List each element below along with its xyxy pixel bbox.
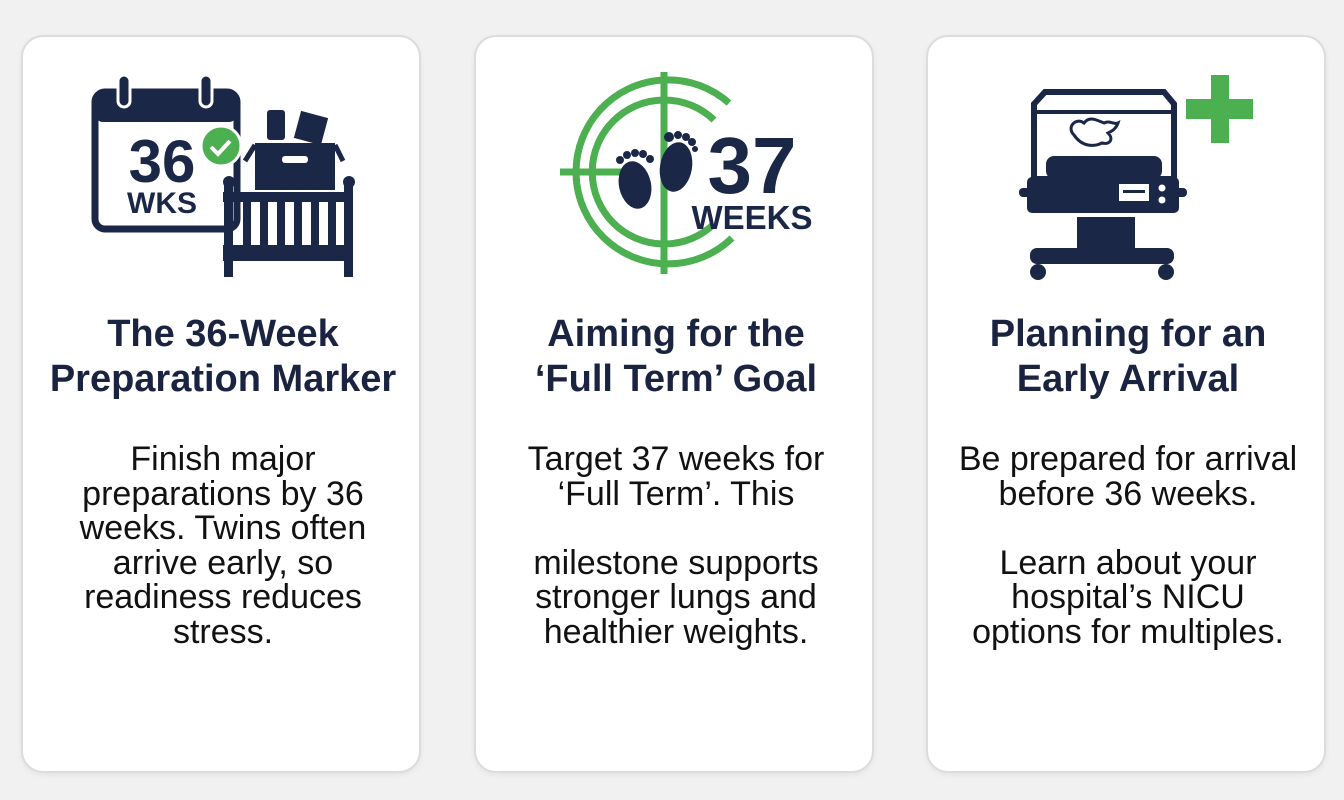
- panel: full term goal: [474, 35, 874, 773]
- text block: ‘Full Term’. This: [558, 475, 794, 513]
- text block: stronger lungs and: [535, 578, 817, 616]
- text block: arrive early, so: [113, 544, 333, 582]
- heading: [50, 313, 396, 400]
- heading: The 36-Week: [107, 313, 339, 355]
- heading: [990, 313, 1266, 400]
- text block: Learn about your: [999, 544, 1257, 582]
- text block: Finish major: [130, 440, 316, 478]
- heading: [535, 313, 817, 400]
- icon: calendar with crib and box: [92, 76, 355, 277]
- text block: [80, 440, 366, 651]
- text block: stress.: [173, 613, 273, 651]
- icon: target with feet and 37 weeks: [560, 72, 813, 274]
- heading: ‘Full Term’ Goal: [535, 358, 817, 400]
- text block: healthier weights.: [544, 613, 808, 651]
- text block: Target 37 weeks for: [528, 440, 824, 478]
- panel: 36-week preparation: [21, 35, 421, 773]
- icon: target with feet and 37 weeks: WEEKS: [691, 199, 813, 236]
- text block: Be prepared for arrival: [959, 440, 1297, 478]
- text block: [528, 440, 824, 651]
- text block: preparations by 36: [82, 475, 364, 513]
- text block: readiness reduces: [84, 578, 362, 616]
- text block: hospital’s NICU: [1011, 578, 1245, 616]
- heading: Preparation Marker: [50, 358, 396, 400]
- icon: incubator with medical cross: [1019, 75, 1253, 280]
- text block: milestone supports: [533, 544, 819, 582]
- panel: early arrival: [926, 35, 1326, 773]
- text block: [959, 440, 1297, 651]
- text block: weeks. Twins often: [80, 509, 366, 547]
- text block: options for multiples.: [972, 613, 1284, 651]
- heading: Early Arrival: [1017, 358, 1239, 400]
- heading: Planning for an: [990, 313, 1266, 355]
- icon: target with feet and 37 weeks: 37: [708, 121, 796, 210]
- heading: Aiming for the: [547, 313, 805, 355]
- icon: calendar with crib and box: 36: [129, 128, 195, 195]
- text block: before 36 weeks.: [999, 475, 1257, 513]
- icon: calendar with crib and box: WKS: [127, 187, 197, 220]
